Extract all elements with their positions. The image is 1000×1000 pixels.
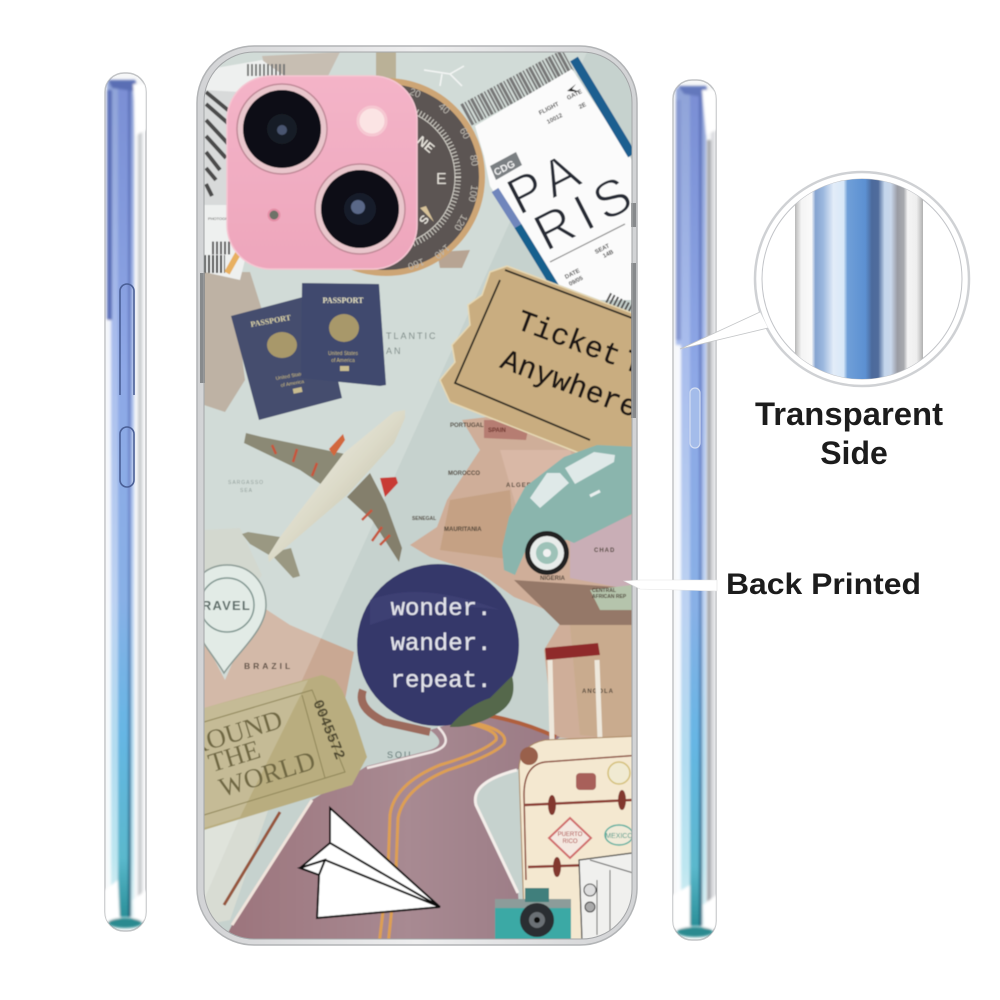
map labels: SOU bbox=[387, 750, 413, 760]
map labels: AN bbox=[386, 346, 403, 356]
left boarding pass bbox=[204, 60, 290, 280]
suitcase: PUERTO bbox=[558, 832, 583, 838]
map labels: CENTRAL bbox=[592, 588, 616, 594]
map labels: SARGASSO bbox=[228, 480, 264, 486]
ticket to anywhere: Ticket T bbox=[511, 306, 647, 384]
compass: 160 bbox=[406, 255, 426, 272]
paris boarding pass: 09/05 bbox=[568, 275, 585, 288]
suitcase: MEXICO bbox=[605, 833, 633, 840]
map labels bbox=[228, 331, 627, 760]
round the world ticket: ROUND bbox=[185, 704, 286, 761]
compass: 80 bbox=[467, 154, 480, 167]
label: transparent side: Transparent bbox=[755, 396, 943, 432]
continent: north america bbox=[204, 272, 262, 412]
round the world ticket: THE bbox=[205, 734, 264, 778]
paris boarding pass: GATE bbox=[566, 89, 583, 102]
camera flash bbox=[358, 107, 386, 135]
label: transparent side: Side bbox=[820, 435, 888, 471]
map labels: PORTUGAL bbox=[450, 423, 484, 429]
label: back printed: Back Printed bbox=[726, 568, 921, 601]
rim side button marks bbox=[200, 203, 636, 418]
back passport bbox=[231, 293, 342, 420]
map labels: CHAD bbox=[594, 548, 615, 554]
paris boarding pass: 10012 bbox=[546, 113, 564, 126]
compass: NE bbox=[414, 133, 438, 156]
round the world ticket: WORLD bbox=[215, 745, 319, 803]
ticket to anywhere: Anywhere bbox=[495, 345, 642, 427]
map labels: BRAZIL bbox=[244, 661, 293, 671]
front passport bbox=[301, 283, 386, 386]
map labels: MOROCCO bbox=[448, 471, 480, 477]
right side view of case bbox=[673, 80, 716, 940]
continent: africa bbox=[410, 400, 632, 745]
suitcase bbox=[519, 643, 640, 945]
wonder wander repeat badge bbox=[357, 564, 519, 727]
back passport: PASSPORT bbox=[250, 313, 292, 329]
phone case back bbox=[185, 46, 647, 945]
paris boarding pass: SEAT bbox=[594, 243, 611, 256]
front passport: United States bbox=[328, 351, 359, 357]
sketched bag bbox=[578, 852, 632, 938]
paper plane bbox=[300, 808, 440, 918]
back printed pointer bbox=[624, 580, 717, 591]
compass: 100 bbox=[466, 184, 479, 203]
compass: 40 bbox=[436, 101, 452, 117]
front passport: PASSPORT bbox=[323, 296, 364, 305]
continent: lower left land bbox=[204, 811, 268, 922]
road bbox=[222, 690, 560, 945]
left boarding pass: PHOTOGRAPHY bbox=[208, 216, 239, 221]
back passport: of America bbox=[280, 379, 305, 389]
compass: E bbox=[436, 171, 447, 188]
camera microphone bbox=[268, 210, 280, 220]
airplane bbox=[242, 410, 405, 578]
compass bbox=[352, 52, 486, 276]
map labels: TLANTIC bbox=[386, 331, 438, 341]
compass: 20 bbox=[408, 87, 422, 101]
camera lens bottom bbox=[315, 164, 405, 254]
paris boarding pass: RIS bbox=[525, 162, 647, 263]
travel pin: TRAVEL bbox=[193, 598, 251, 613]
map labels: SPAIN bbox=[488, 428, 506, 434]
magnified transparent side bbox=[680, 172, 969, 386]
map labels: ANGOLA bbox=[582, 689, 614, 695]
back passport: United States bbox=[275, 371, 306, 382]
wonder wander repeat badge: wonder. bbox=[391, 596, 491, 623]
map labels: AFRICAN REP bbox=[592, 594, 627, 600]
left side buttons bbox=[120, 284, 134, 487]
continent: south america bbox=[204, 610, 354, 708]
passports bbox=[231, 283, 386, 420]
camera module bbox=[227, 76, 417, 269]
map labels: NIGERIA bbox=[540, 576, 566, 582]
compass: 60 bbox=[457, 126, 472, 142]
camera lens top bbox=[237, 84, 327, 174]
right side button bbox=[690, 388, 700, 448]
map labels: ALGERIA bbox=[506, 483, 540, 489]
round the world ticket: 0045572 bbox=[308, 698, 348, 762]
car bbox=[502, 445, 640, 575]
suitcase: RICO bbox=[562, 839, 578, 845]
round the world ticket bbox=[204, 675, 368, 830]
paris boarding pass: FLIGHT bbox=[538, 101, 561, 117]
glass reflection bbox=[204, 52, 587, 900]
map labels: SENEGAL bbox=[412, 516, 436, 522]
map labels: MAURITANIA bbox=[444, 527, 482, 533]
paris boarding pass bbox=[466, 59, 647, 312]
label: transparent side bbox=[755, 396, 943, 471]
map labels: SEA bbox=[240, 488, 253, 494]
paris boarding pass: DATE bbox=[564, 268, 581, 281]
paris boarding pass: 14B bbox=[602, 249, 615, 260]
compass: 140 bbox=[431, 241, 452, 261]
paris boarding pass: PA bbox=[498, 139, 595, 227]
travel pin bbox=[204, 564, 268, 674]
left side view of case bbox=[105, 73, 146, 931]
wonder wander repeat badge: repeat. bbox=[391, 668, 491, 695]
compass: S bbox=[416, 212, 432, 227]
wonder wander repeat badge: wander. bbox=[391, 631, 491, 658]
continent: top land bbox=[262, 52, 340, 76]
ticket to anywhere bbox=[439, 265, 632, 453]
compass: 120 bbox=[451, 212, 469, 233]
paris boarding pass: 2E bbox=[578, 102, 587, 111]
world map background bbox=[202, 51, 634, 940]
teal camera bbox=[495, 888, 571, 945]
paris boarding pass: CDG bbox=[492, 159, 517, 179]
front passport: of America bbox=[331, 358, 355, 364]
